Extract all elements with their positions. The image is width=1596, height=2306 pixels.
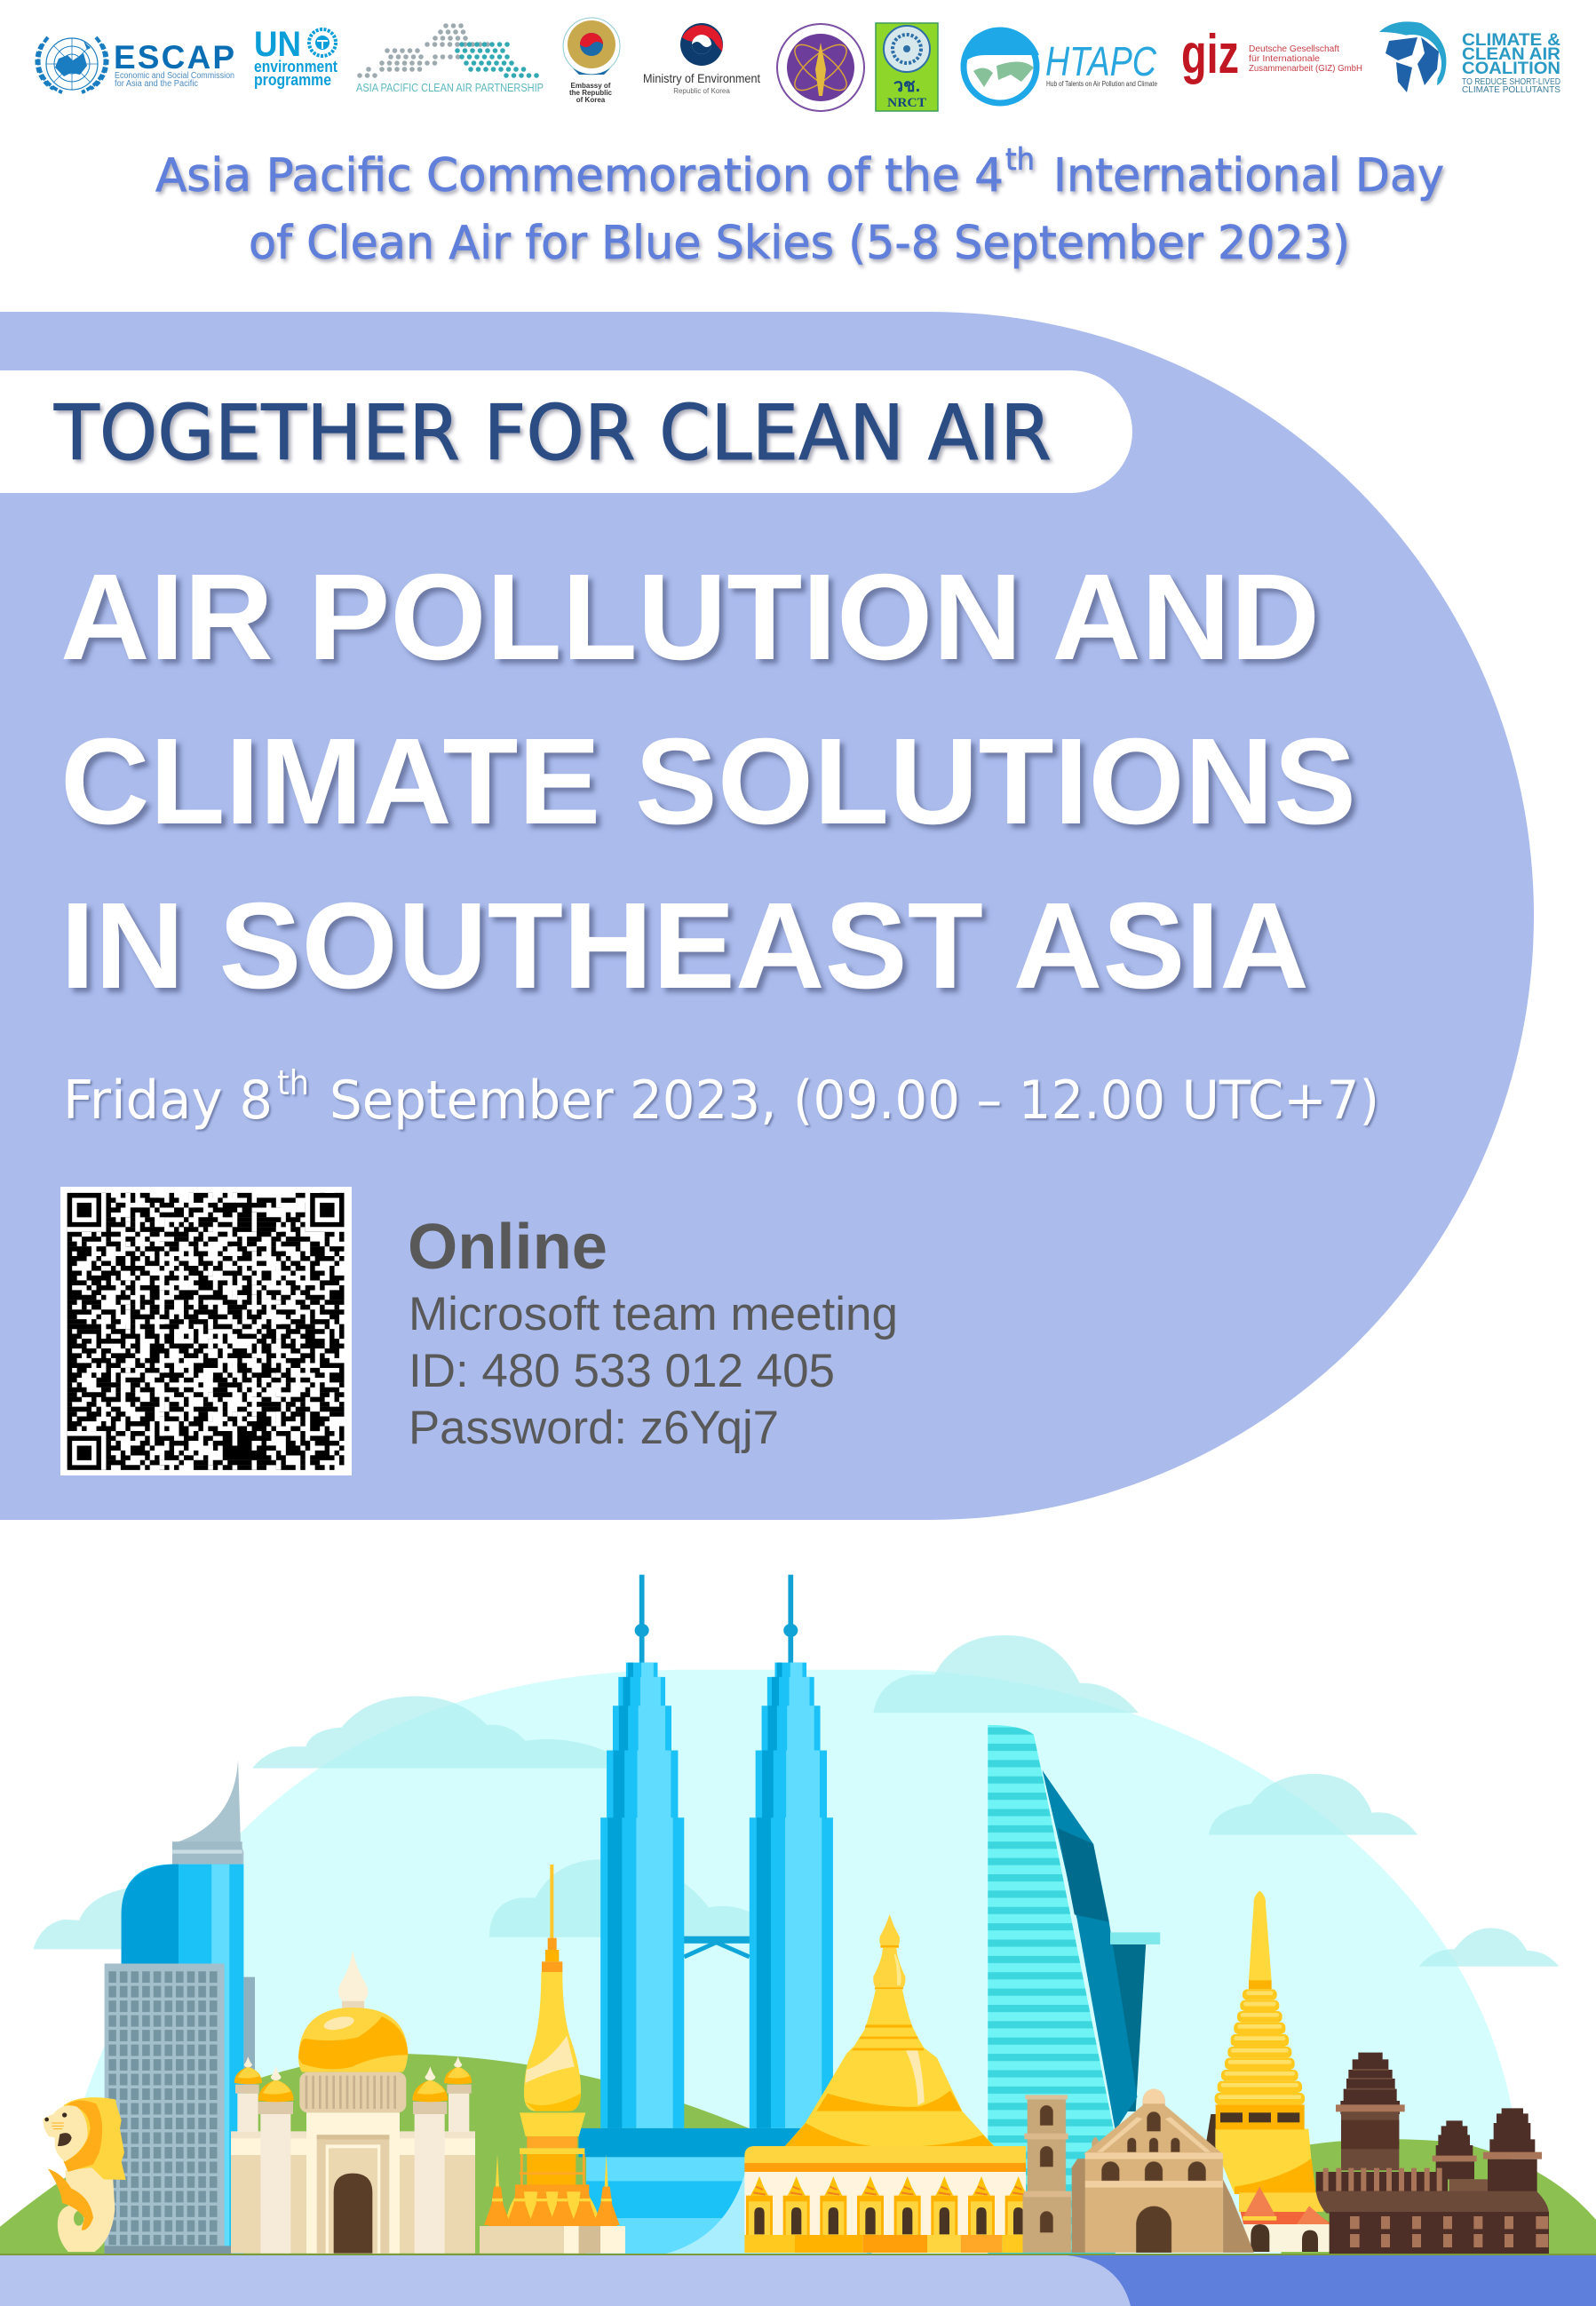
golden stupa [480, 1865, 625, 2254]
main title: IN SOUTHEAST ASIA [60, 878, 1309, 1014]
sky dome [76, 1670, 1514, 2254]
logo: Climate and Clean Air Coalition: TO REDUCE SHORT-LIVED [1462, 77, 1560, 87]
theme pill [0, 370, 1132, 493]
online meeting details [408, 1212, 898, 1454]
panel: main blue event panel [0, 312, 1534, 1520]
water and base of twin towers [578, 2128, 872, 2254]
logo: giz [1181, 24, 1362, 85]
logo: Ministry of Environment: Republic of Korea [673, 87, 730, 95]
header title: th [1005, 142, 1035, 178]
event date: September 2023, (09.00 – 12.00 UTC+7) [330, 1070, 1379, 1132]
ground band [0, 2254, 1596, 2306]
logo: NRCT [876, 23, 938, 111]
logo: Embassy of the Republic of Korea: of Korea [576, 96, 606, 104]
event date: Friday 8 [63, 1070, 273, 1132]
logo: ESCAP: ESCAP [114, 39, 234, 76]
online meeting details: Microsoft team meeting [409, 1288, 898, 1340]
logo: Asia Pacific Clean Air Partnership [356, 26, 544, 94]
golden stupa with red shrine [1205, 1890, 1331, 2252]
logo: NRCT: NRCT [887, 96, 926, 110]
online meeting details: Password: z6Yqj7 [409, 1402, 779, 1454]
logo: Climate and Clean Air Coalition: CLIMATE POLLUTANTS [1462, 85, 1560, 95]
QR code [60, 1187, 352, 1475]
logo: Climate and Clean Air Coalition [1379, 21, 1560, 95]
teardrop glass skyscraper [988, 1725, 1160, 2254]
logo: Embassy of the Republic of Korea [563, 18, 620, 104]
logo: giz: für Internationale [1249, 54, 1320, 64]
main title: AIR POLLUTION AND [60, 549, 1320, 686]
grey office block [105, 1964, 232, 2254]
green hills [0, 2054, 1596, 2254]
logo: HTAPC [964, 28, 1157, 103]
logo: Asia Pacific Clean Air Partnership: ASIA PACIFIC CLEAN AIR PARTNERSHIP [356, 81, 544, 94]
left Petronas tower [600, 1575, 684, 2128]
header title: Asia Pacific Commemoration of the 4 [155, 149, 1004, 203]
header title: International Day [1053, 149, 1444, 203]
logo: UN environment programme: UN [254, 25, 301, 64]
logo: HTAPC: HTAPC [1045, 38, 1157, 84]
logo: Ministry of Environment: Ministry of Environment [643, 71, 760, 85]
logo: ESCAP [36, 37, 234, 92]
logo: giz: giz [1181, 24, 1239, 85]
logo: Embassy of the Republic of Korea: Embassy of [571, 82, 611, 90]
theme heading: TOGETHER FOR CLEAN AIR [53, 389, 1052, 478]
right Petronas tower [750, 1575, 833, 2128]
logo: HTAPC: Hub of Talents on Air Pollution and Climate [1046, 80, 1157, 88]
skybridge [682, 1936, 751, 1957]
old town hall building [1023, 2089, 1254, 2253]
logo: ESCAP: for Asia and the Pacific [115, 79, 198, 89]
logo: purple seal [777, 24, 864, 111]
Shwedagon pagoda [744, 1914, 1032, 2253]
logo: NRCT: วช. [893, 76, 920, 96]
blue curved tower [122, 1760, 255, 2254]
domed mosque [231, 1952, 475, 2254]
header title: of Clean Air for Blue Skies (5-8 September 2023) [249, 217, 1350, 270]
online meeting details: ID: 480 533 012 405 [409, 1345, 835, 1397]
logo: UN environment programme: environment [254, 58, 337, 76]
logo: giz: Zusammenarbeit (GIZ) GmbH [1249, 64, 1362, 74]
merlion statue [43, 2097, 126, 2252]
logo: Climate and Clean Air Coalition: CLEAN AIR [1462, 45, 1560, 64]
logo: Climate and Clean Air Coalition: CLIMATE & [1462, 31, 1560, 50]
city skyline illustration [0, 1575, 1596, 2254]
Angkor temple [1316, 2053, 1549, 2254]
main title [60, 549, 1356, 1014]
clouds [33, 1635, 1559, 1967]
logo: Ministry of Environment [643, 23, 760, 95]
logo: giz: Deutsche Gesellschaft [1249, 44, 1339, 54]
logo: UN environment programme [254, 25, 337, 89]
main title: CLIMATE SOLUTIONS [60, 713, 1356, 850]
logo: Climate and Clean Air Coalition: COALITION [1462, 60, 1560, 78]
online meeting details: Online [408, 1212, 607, 1283]
logo strip [36, 18, 1560, 111]
logo: UN environment programme: programme [254, 71, 331, 89]
logo: ESCAP: Economic and Social Commission [115, 71, 234, 81]
logo: Embassy of the Republic of Korea: the Republic [569, 89, 613, 97]
header title [155, 142, 1444, 270]
event date: th [277, 1063, 309, 1102]
